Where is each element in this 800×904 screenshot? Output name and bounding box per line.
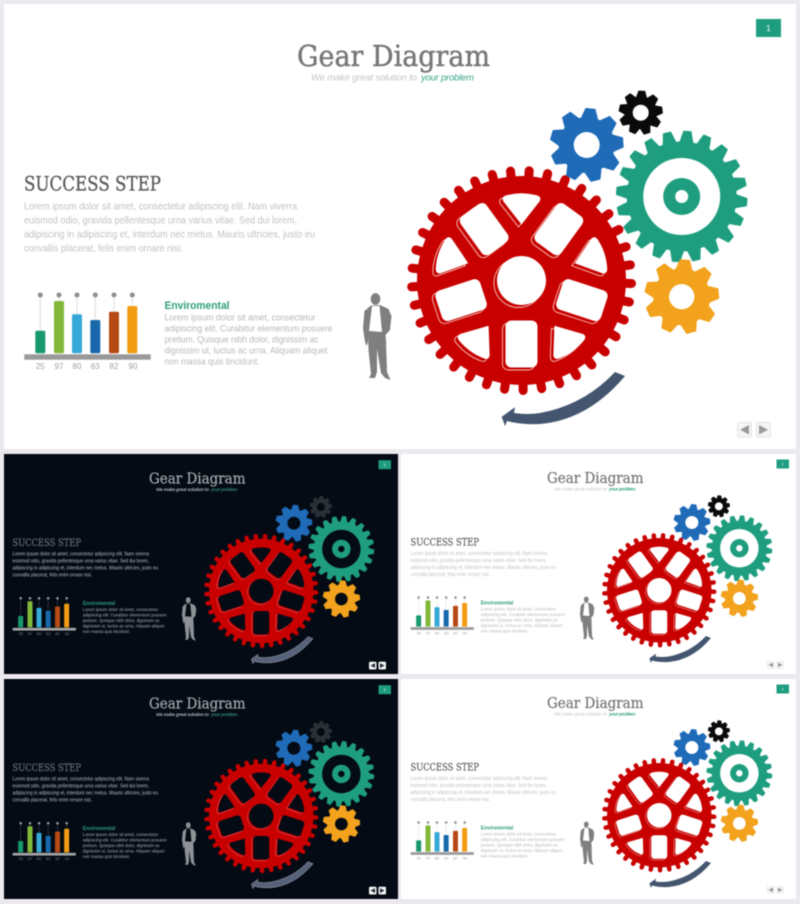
body paragraph: convallis placerat, felis enim ornare nisi.	[410, 797, 490, 803]
heading: enviromental: Enviromental	[481, 600, 514, 606]
enviromental text: adipiscing elit. Curabitur elementum posuere	[83, 613, 167, 619]
bar chart: 97	[55, 362, 64, 371]
slide background	[4, 454, 398, 674]
heading: enviromental: Enviromental	[164, 300, 230, 312]
body paragraph: convallis placerat, felis enim ornare nisi.	[410, 572, 490, 578]
enviromental text: pretium. Quisque nibh dolor, dignissim ac	[481, 842, 558, 848]
bar chart: 25	[18, 856, 24, 861]
navigation buttons	[767, 661, 784, 668]
bar chart: 25	[18, 631, 24, 636]
body paragraph: Lorem ipsum dolor sit amet, consectetur adipiscing elit. Nam viverra	[410, 551, 547, 557]
bar chart: 63	[46, 631, 51, 636]
icon: black gear	[618, 90, 664, 136]
title: Gear Diagram	[149, 697, 246, 713]
enviromental text: dignissim ut, luctus ac urna. Aliquam aliquet	[481, 848, 563, 854]
subtitle	[156, 712, 238, 718]
icon: blue gear	[672, 503, 712, 543]
heading: enviromental: Enviromental	[83, 826, 116, 832]
bar chart: 97	[426, 856, 431, 860]
icon: black gear	[707, 495, 730, 518]
icon: red gear	[601, 757, 718, 874]
bar chart: 25	[416, 630, 422, 636]
arrow: rotation	[649, 861, 711, 888]
body paragraph: euismod odio, gravida pellentesque urna varius vitae. Sed dui lorem,	[12, 558, 149, 564]
enviromental text: Lorem ipsum dolor sit amet, consectetur	[83, 607, 159, 613]
icon: black gear	[309, 496, 332, 519]
navigation buttons	[369, 887, 386, 894]
page badge: 1	[782, 686, 785, 692]
icon: red gear	[404, 163, 639, 398]
icon: green gear	[306, 514, 377, 584]
enviromental text	[164, 312, 332, 368]
icon: blue gear	[672, 728, 712, 768]
bar chart	[411, 821, 474, 860]
bar chart: 63	[444, 856, 449, 860]
enviromental text: adipiscing elit. Curabitur elementum posuere	[164, 324, 332, 335]
body paragraph: euismod odio, gravida pellentesque urna varius vitae. Sed dui lorem,	[410, 783, 547, 789]
arrow: rotation	[251, 862, 313, 889]
bar chart: 63	[444, 630, 449, 636]
subtitle: your problem	[210, 712, 238, 718]
bar chart	[411, 596, 474, 636]
body paragraph: euismod odio, gravida pellentesque urna varius vitae. Sed dui lorem,	[12, 783, 149, 789]
enviromental text: pretium. Quisque nibh dolor, dignissim ac	[83, 843, 160, 849]
subtitle: We make great solution to	[156, 487, 209, 493]
enviromental text: pretium. Quisque nibh dolor, dignissim ac	[164, 335, 319, 346]
slide background	[4, 679, 398, 899]
icon: person silhouette	[580, 597, 594, 640]
subtitle: your problem	[608, 486, 636, 492]
title: Gear Diagram	[297, 39, 490, 73]
icon: green gear	[611, 126, 752, 267]
bar chart: 80	[73, 362, 82, 371]
subtitle: We make great solution to	[156, 712, 209, 718]
page badge: 1	[782, 462, 785, 466]
body paragraph	[410, 551, 556, 578]
bar chart: 97	[28, 631, 33, 636]
icon: orange gear	[719, 804, 760, 843]
icon: person silhouette	[580, 822, 594, 865]
enviromental text: adipiscing elit. Curabitur elementum posuere	[481, 837, 565, 843]
icon: orange gear	[321, 804, 362, 844]
bar chart: 90	[129, 362, 138, 371]
subtitle: your problem	[420, 72, 474, 84]
icon: person silhouette	[182, 822, 196, 866]
body paragraph: euismod odio, gravida pellentesque urna varius vitae. Sed dui lorem,	[24, 214, 297, 226]
subtitle	[554, 711, 636, 717]
title: Gear Diagram	[547, 696, 644, 712]
enviromental text: non massa quis tincidunt.	[481, 853, 528, 859]
bar chart: 82	[453, 630, 458, 636]
bar chart: 90	[65, 631, 70, 636]
page badge	[756, 19, 781, 37]
page badge: 1	[384, 687, 387, 692]
body paragraph: adipiscing in adipiscing et, interdum nec metus. Mauris ultricies, justo eu	[12, 790, 158, 796]
navigation buttons	[369, 662, 386, 669]
icon: green gear	[704, 513, 775, 583]
enviromental text: dignissim ut, luctus ac urna. Aliquam aliquet	[83, 624, 165, 630]
heading: enviromental: Enviromental	[83, 601, 116, 607]
enviromental text: pretium. Quisque nibh dolor, dignissim ac	[83, 618, 160, 624]
enviromental text: adipiscing elit. Curabitur elementum posuere	[481, 612, 565, 618]
bar chart: 90	[463, 856, 468, 860]
enviromental text: non massa quis tincidunt.	[83, 854, 130, 860]
title: Gear Diagram	[149, 472, 246, 488]
bar chart: 80	[37, 856, 42, 861]
icon: red gear	[601, 532, 718, 649]
body paragraph: convallis placerat, felis enim ornare nisi.	[12, 797, 92, 803]
bar chart	[13, 597, 76, 636]
subtitle: We make great solution to	[311, 72, 417, 84]
enviromental text: Lorem ipsum dolor sit amet, consectetur	[481, 606, 557, 612]
enviromental text: non massa quis tincidunt.	[164, 357, 260, 368]
icon: blue gear	[274, 503, 314, 543]
navigation buttons	[738, 422, 770, 437]
icon: red gear	[203, 532, 320, 649]
icon: blue gear	[274, 728, 314, 768]
bar chart: 90	[463, 630, 468, 636]
icon: orange gear	[719, 579, 760, 618]
subtitle: your problem	[210, 487, 238, 493]
bar chart: 80	[435, 856, 440, 860]
body paragraph	[12, 551, 158, 578]
icon: black gear	[707, 720, 730, 743]
subtitle: We make great solution to	[554, 711, 607, 717]
body paragraph: convallis placerat, felis enim ornare nisi.	[24, 242, 183, 254]
arrow: rotation	[251, 637, 313, 664]
body paragraph: adipiscing in adipiscing et, interdum nec metus. Mauris ultricies, justo eu	[410, 790, 556, 796]
heading: success step: SUCCESS STEP	[410, 537, 479, 548]
body paragraph: adipiscing in adipiscing et, interdum nec metus. Mauris ultricies, justo eu	[410, 565, 556, 571]
icon: orange gear	[641, 257, 722, 337]
body paragraph	[410, 776, 556, 803]
bar chart	[24, 292, 151, 371]
heading: success step: SUCCESS STEP	[12, 763, 81, 774]
enviromental text: Lorem ipsum dolor sit amet, consectetur	[164, 312, 316, 324]
bar chart	[13, 822, 76, 861]
enviromental text: non massa quis tincidunt.	[481, 628, 528, 634]
body paragraph: adipiscing in adipiscing et, interdum nec metus. Mauris ultricies, justo eu	[12, 565, 158, 571]
heading: success step: SUCCESS STEP	[410, 762, 479, 773]
bar chart: 25	[416, 856, 422, 860]
page badge: 1	[384, 462, 387, 467]
slide content	[410, 684, 789, 894]
bar chart: 63	[46, 856, 51, 861]
bar chart: 82	[55, 856, 60, 861]
heading: enviromental: Enviromental	[481, 826, 514, 832]
slide content	[12, 460, 391, 669]
enviromental text	[481, 606, 565, 634]
icon: person silhouette	[363, 293, 392, 380]
heading: success step: SUCCESS STEP	[24, 172, 161, 196]
slide background	[401, 454, 796, 674]
subtitle	[311, 72, 474, 84]
panel: light slide bottom	[401, 679, 796, 899]
bar chart: 25	[36, 362, 45, 371]
slide content	[410, 460, 789, 668]
icon: green gear	[704, 738, 775, 808]
icon: red gear	[203, 757, 320, 874]
page badge	[378, 685, 391, 694]
enviromental text: adipiscing elit. Curabitur elementum posuere	[83, 838, 167, 844]
bar chart: 80	[37, 631, 42, 636]
icon: black gear	[309, 721, 332, 744]
bar chart: 80	[435, 630, 440, 636]
panel: dark slide bottom	[4, 679, 398, 899]
body paragraph: convallis placerat, felis enim ornare nisi.	[12, 572, 92, 578]
page badge	[378, 460, 391, 469]
bar chart: 97	[426, 630, 431, 636]
arrow: rotation	[649, 636, 711, 663]
enviromental text: dignissim ut, luctus ac urna. Aliquam aliquet	[481, 623, 563, 629]
slide content	[12, 685, 391, 894]
bar chart: 82	[55, 631, 60, 636]
body paragraph: adipiscing in adipiscing et, interdum nec metus. Mauris ultricies, justo eu	[24, 228, 315, 240]
panel: dark slide top	[4, 454, 398, 674]
body paragraph: Lorem ipsum dolor sit amet, consectetur adipiscing elit. Nam viverra	[12, 776, 149, 782]
enviromental text	[481, 831, 565, 859]
body paragraph	[12, 776, 158, 803]
subtitle	[554, 486, 636, 492]
bar chart: 97	[28, 856, 33, 861]
navigation buttons	[767, 886, 784, 894]
page badge: 1	[766, 24, 771, 33]
page badge	[776, 460, 789, 468]
subtitle: your problem	[608, 711, 636, 717]
bar chart: 82	[453, 856, 458, 860]
subtitle	[156, 487, 238, 493]
arrow: rotation	[502, 372, 625, 426]
subtitle: We make great solution to	[554, 486, 607, 492]
body paragraph: Lorem ipsum dolor sit amet, consectetur adipiscing elit. Nam viverra	[410, 776, 547, 782]
icon: orange gear	[321, 579, 362, 619]
panel: large light slide	[4, 4, 796, 449]
slide background	[401, 679, 796, 899]
body paragraph: Lorem ipsum dolor sit amet, consectetur adipiscing elit. Nam viverra	[24, 200, 297, 212]
enviromental text	[83, 607, 167, 635]
bar chart: 63	[91, 362, 100, 371]
enviromental text: dignissim ut, luctus ac urna. Aliquam aliquet	[164, 346, 328, 357]
page badge	[776, 684, 789, 694]
icon: green gear	[306, 739, 377, 809]
enviromental text: dignissim ut, luctus ac urna. Aliquam aliquet	[83, 849, 165, 855]
heading: success step: SUCCESS STEP	[12, 538, 81, 549]
body paragraph: euismod odio, gravida pellentesque urna varius vitae. Sed dui lorem,	[410, 558, 547, 564]
slide background	[4, 4, 796, 449]
body paragraph: Lorem ipsum dolor sit amet, consectetur adipiscing elit. Nam viverra	[12, 551, 149, 557]
panel: light slide top	[401, 454, 796, 674]
enviromental text: non massa quis tincidunt.	[83, 629, 130, 635]
body paragraph	[24, 200, 315, 254]
enviromental text: pretium. Quisque nibh dolor, dignissim ac	[481, 617, 558, 623]
enviromental text: Lorem ipsum dolor sit amet, consectetur	[83, 832, 159, 838]
icon: blue gear	[546, 105, 627, 185]
bar chart: 90	[65, 856, 70, 861]
enviromental text: Lorem ipsum dolor sit amet, consectetur	[481, 831, 557, 837]
enviromental text	[83, 832, 167, 860]
icon: person silhouette	[182, 597, 196, 641]
title: Gear Diagram	[547, 471, 644, 487]
bar chart: 82	[110, 362, 119, 371]
